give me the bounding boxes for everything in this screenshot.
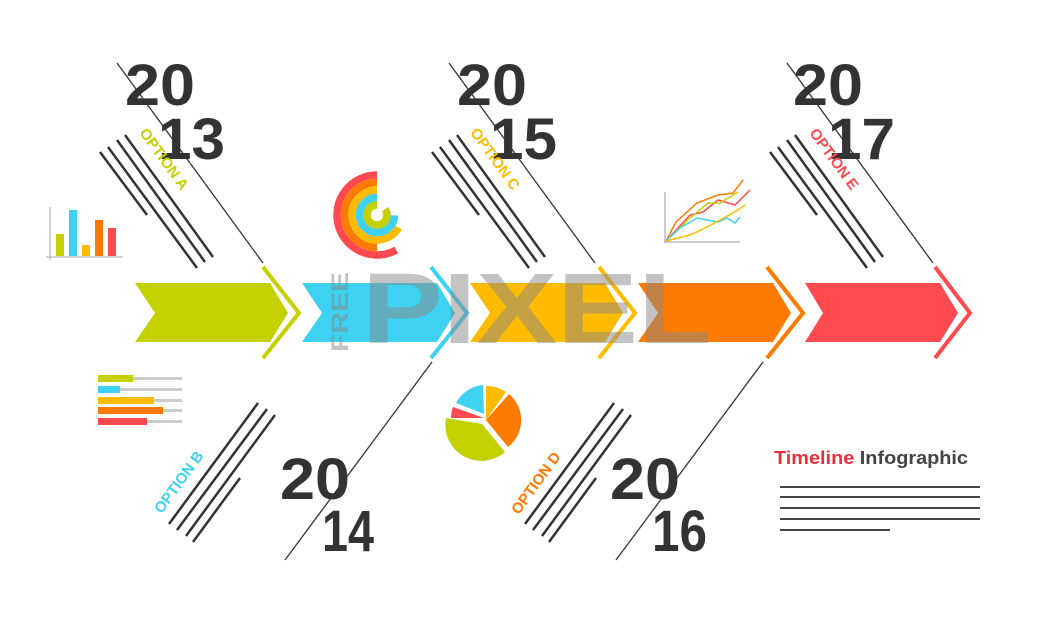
milestone 2014 <box>151 362 432 564</box>
milestone 2013: 20 <box>125 53 195 118</box>
milestone 2013 <box>100 53 263 268</box>
milestone 2017 <box>770 53 933 268</box>
milestone 2015: 20 <box>457 53 527 118</box>
milestone 2014: 20 <box>280 447 350 512</box>
milestone 2013: 13 <box>158 107 225 172</box>
milestone 2014: OPTION B <box>151 448 208 517</box>
milestone 2017: 20 <box>793 53 863 118</box>
icon: line chart <box>665 180 750 243</box>
watermark: FREE <box>327 272 354 352</box>
arrow A green <box>135 267 299 358</box>
milestone 2015: OPTION C <box>466 125 523 194</box>
arrow B blue <box>302 267 467 358</box>
milestone 2016: OPTION D <box>508 449 565 518</box>
milestone 2015: 15 <box>490 107 557 172</box>
milestone 2013: OPTION A <box>136 125 192 194</box>
milestone 2015 <box>432 53 595 268</box>
watermark: PIXEL <box>362 253 712 365</box>
milestone 2014: 14 <box>322 499 374 564</box>
icon: horizontal bars <box>98 375 182 425</box>
milestone 2016: 16 <box>652 499 707 564</box>
milestone 2017: 17 <box>828 107 895 172</box>
title: Timeline Infographic: Timeline Infographic <box>774 448 968 468</box>
arrow E red <box>805 267 970 358</box>
milestone 2017: OPTION E <box>806 125 862 193</box>
arrow C yellow <box>470 267 635 358</box>
milestone 2016 <box>508 362 763 564</box>
milestone 2016: 20 <box>610 447 680 512</box>
icon: pie chart <box>445 385 521 461</box>
arrow D orange <box>638 267 803 358</box>
icon: bar chart <box>46 207 123 260</box>
icon: radial arcs chart <box>337 175 417 255</box>
